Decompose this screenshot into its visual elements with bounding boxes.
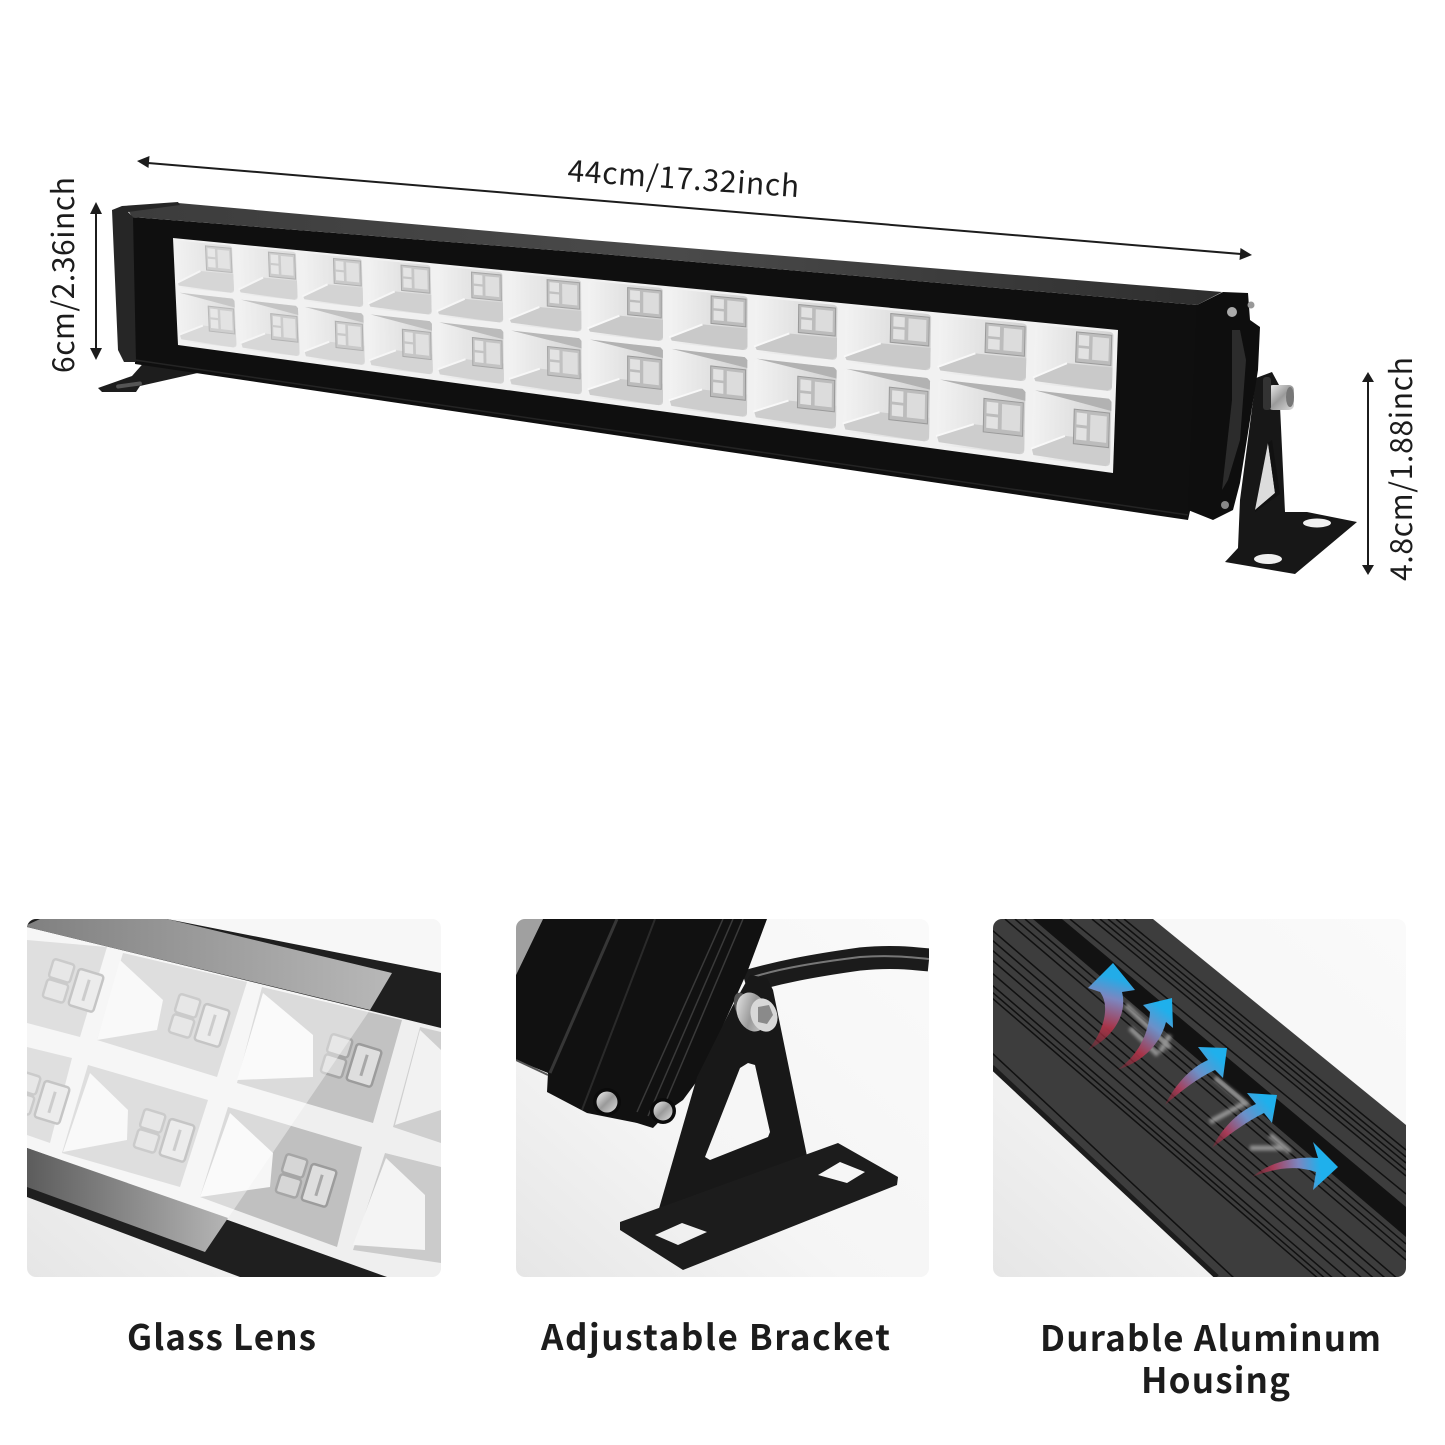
heat dissipation arrows <box>1088 963 1338 1190</box>
arrow 4 <box>1212 1093 1277 1148</box>
bracket upright <box>658 975 807 1212</box>
lens close-up base <box>369 1011 441 1166</box>
arrow 3 <box>1165 1047 1227 1105</box>
lower row of LED cells <box>177 292 1112 467</box>
dimension: bracket height label: 4.8cm/1.88inch <box>1377 357 1421 581</box>
glass reflection on bottom band <box>27 1148 228 1252</box>
caption: durable aluminum housing <box>1040 1311 1381 1404</box>
bracket foot <box>620 1143 898 1270</box>
aluminium extrusion <box>992 919 1406 1277</box>
dimension: bracket height arrow <box>1362 372 1374 575</box>
dimension: length arrow <box>137 156 1252 260</box>
housing bottom edge <box>135 360 1188 515</box>
dimension: length label: 44cm/17.32inch <box>566 146 801 206</box>
edge shading <box>992 1067 1217 1277</box>
housing top strip <box>128 203 1222 305</box>
left mounting foot <box>98 358 202 392</box>
screws <box>596 1092 676 1124</box>
dimension: height arrow <box>90 202 102 360</box>
caption: durable aluminum housing: Housing <box>1141 1353 1290 1404</box>
dimension: height label: 6cm/2.36inch <box>39 177 83 373</box>
glass highlight overlay <box>27 940 368 1210</box>
left end cap <box>112 202 180 362</box>
extrusion ribs <box>993 919 1406 1277</box>
right end cap <box>1188 292 1260 520</box>
housing end cap <box>516 919 767 1128</box>
arrow 5 <box>1252 1142 1338 1190</box>
panel: durable aluminum housing <box>993 919 1406 1277</box>
housing face <box>132 217 1215 520</box>
right bracket <box>1225 372 1357 574</box>
bottom housing band <box>27 1148 387 1277</box>
bracket bolt <box>1263 377 1294 410</box>
power cable <box>745 956 929 982</box>
lens glimpse <box>516 919 543 975</box>
arrow 1 <box>1088 963 1135 1050</box>
product photo: UV LED light bar <box>98 202 1357 574</box>
upper row of LED cells <box>175 240 1114 391</box>
ventilation slot <box>1033 919 1406 1237</box>
caption: glass lens: Glass Lens <box>127 1310 316 1361</box>
top housing band <box>27 919 441 1028</box>
panel: adjustable bracket <box>516 919 929 1277</box>
heat haze <box>1126 1005 1290 1152</box>
panel: glass lens <box>8 919 441 1277</box>
lens with LED cells <box>173 238 1118 473</box>
arrow 2 <box>1117 998 1173 1070</box>
caption: durable aluminum housing: Durable Aluminum <box>1040 1311 1381 1362</box>
glass reflection on top band <box>27 919 392 1010</box>
caption: adjustable bracket: Adjustable Bracket <box>540 1310 890 1361</box>
adjustment bolt <box>734 992 778 1032</box>
lens cells close-up <box>8 940 441 1263</box>
